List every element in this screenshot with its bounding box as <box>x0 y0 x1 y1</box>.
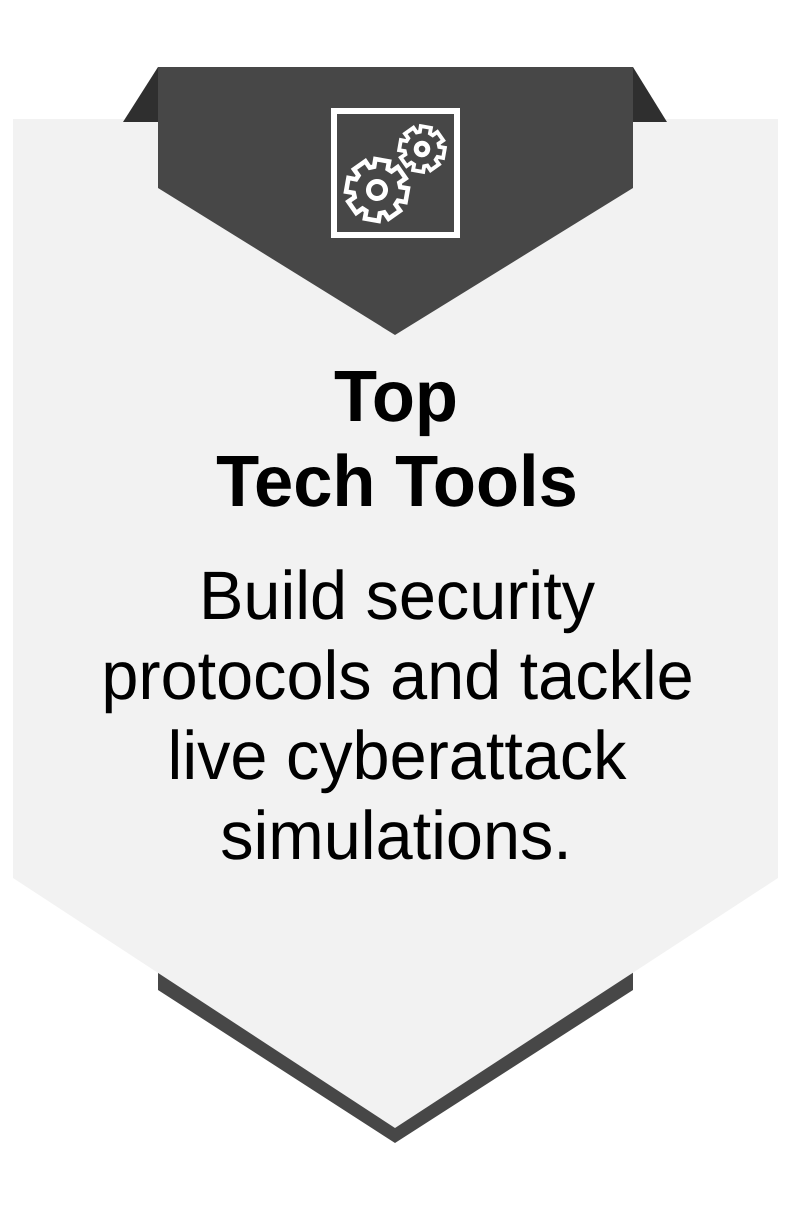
body text: Build security <box>199 558 596 634</box>
top dark ribbon <box>158 67 633 335</box>
title <box>216 355 578 521</box>
icon: gears in a square <box>334 111 457 235</box>
body text: protocols and tackle <box>101 638 694 714</box>
ribbon fold: left <box>123 67 158 122</box>
ribbon fold: right <box>633 67 667 122</box>
body text: live cyberattack <box>168 718 627 794</box>
title: Tech Tools <box>216 440 578 521</box>
body text <box>101 558 694 874</box>
title: Top <box>334 355 458 436</box>
body text: simulations. <box>220 798 572 874</box>
bottom dark chevron <box>158 970 633 1143</box>
